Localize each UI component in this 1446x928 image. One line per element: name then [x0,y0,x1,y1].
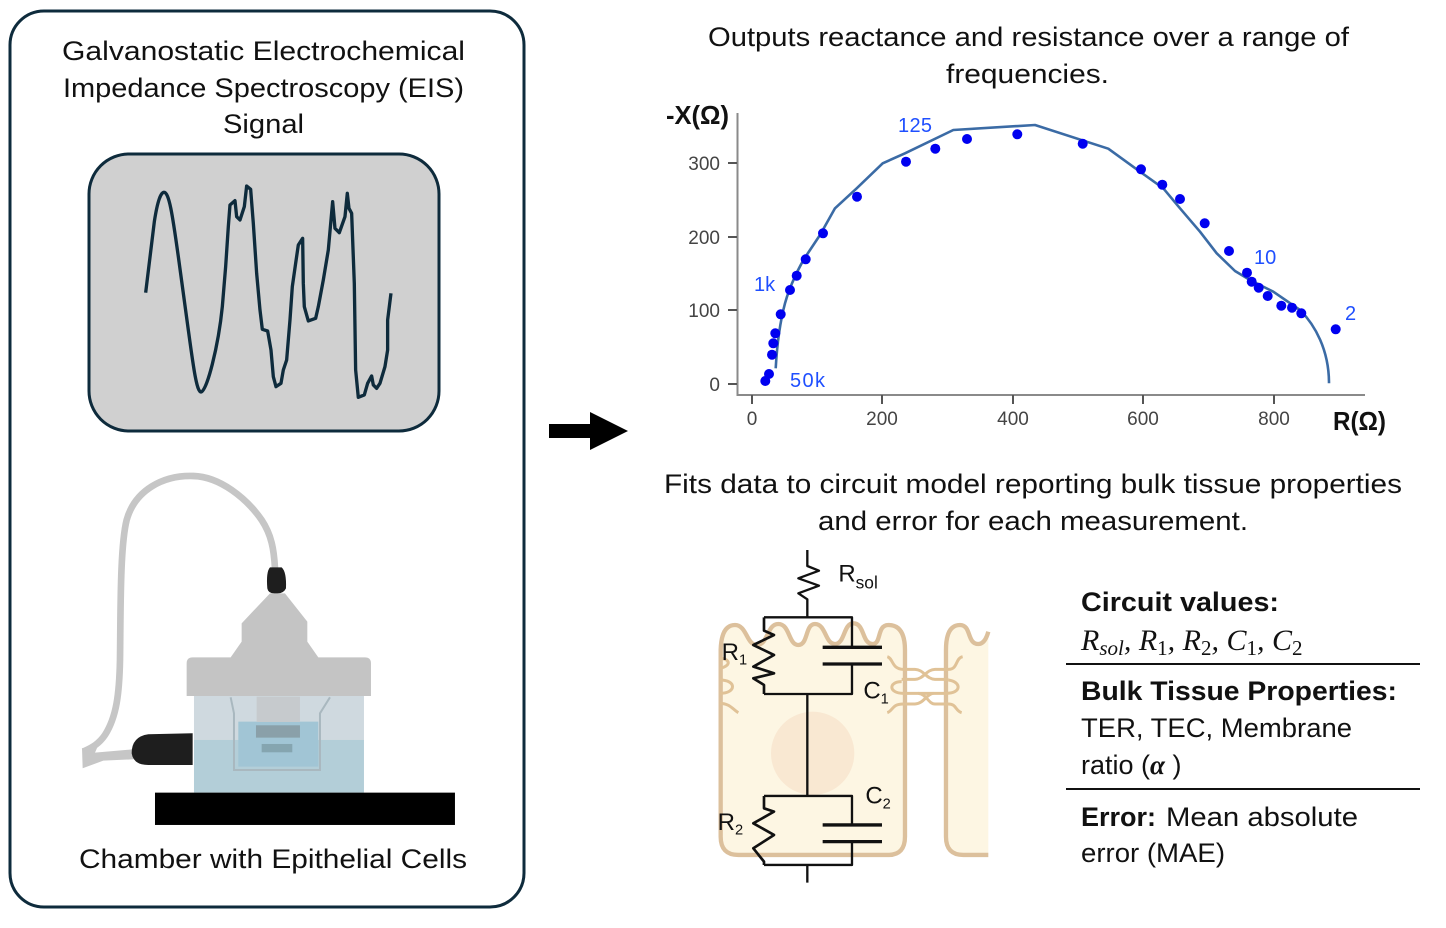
circuit values: , C [1212,624,1248,657]
junctions [720,657,963,713]
bulk tissue properties: Bulk Tissue Properties: [1081,676,1397,706]
circuit lines [753,550,852,883]
frequency labels: 2 [1345,303,1356,325]
circuit labels: sol [856,572,878,592]
frequency labels: 10 [1254,247,1276,269]
circuit labels: 2 [883,797,891,813]
heading: outputs [708,22,1350,89]
circuit labels: R [838,561,856,588]
frequency labels: 1k [754,274,776,296]
frequency labels: 125 [898,115,932,137]
axis labels: 800 [1258,409,1290,430]
circuit values: 2 [1201,636,1212,660]
circuit values: 2 [1292,636,1303,660]
circuit values: , R [1168,624,1201,657]
axes [728,113,1365,404]
fit line [776,125,1329,383]
axis labels: 600 [1127,409,1159,430]
frequency labels [754,115,1356,392]
error: error (MAE) [1081,838,1225,868]
circuit values: R [1081,624,1099,657]
axis labels: 0 [709,375,720,396]
axis labels: 200 [866,409,898,430]
heading: fits [664,469,1402,536]
error: Error: [1081,802,1156,832]
bulk tissue properties: TER, TEC, Membrane [1081,713,1352,743]
axis labels: 0 [747,409,757,430]
circuit values: , C [1257,624,1293,657]
axis labels: 100 [688,301,720,322]
capacitor plates [823,647,882,842]
heading: EIS signal: Signal [223,109,304,139]
cell 2 [946,625,988,855]
bulk tissue properties [1081,676,1397,780]
frequency labels: 50k [790,370,826,392]
signal waveform panel [89,154,439,431]
signal trace [146,186,391,397]
heading: EIS signal: Galvanostatic Electrochemical [62,36,465,66]
arrow [549,412,628,450]
axis labels: 400 [997,409,1029,430]
circuit values: sol [1099,636,1124,660]
circuit labels: 2 [735,823,743,839]
circuit labels: 1 [739,653,747,669]
circuit values [1080,587,1303,660]
heading: outputs: Outputs reactance and resistance over a range of [708,22,1350,52]
axis labels: -X(Ω) [666,100,729,130]
label: chamber: Chamber with Epithelial Cells [79,844,467,874]
circuit labels: R [718,809,735,836]
heading: fits: and error for each measurement. [818,506,1248,536]
illustration: chamber [82,476,455,825]
circuit labels: C [863,677,881,704]
circuit labels: C [865,782,883,809]
heading: EIS signal: Impedance Spectroscopy (EIS) [63,73,464,103]
bulk tissue properties: ratio (α ) [1081,750,1181,780]
diagram: circuit on epithelial cells [718,550,988,883]
circuit labels: 1 [881,692,889,708]
axis labels: 200 [688,228,720,249]
circuit labels: R [722,639,739,666]
circuit labels [718,561,891,839]
chart: Nyquist plot [666,100,1386,436]
nucleus [771,712,854,795]
circuit values: Circuit values: [1081,587,1279,617]
axis labels [666,100,1386,436]
heading: outputs: frequencies. [946,59,1109,89]
cell 1 [721,623,905,855]
error: Mean absolute [1166,802,1358,832]
data points [760,129,1341,386]
circuit values: 1 [1247,636,1257,660]
circuit values: , R [1124,624,1157,657]
axis labels: 300 [688,154,720,175]
heading: EIS signal [62,36,465,139]
panel: outputs list [1066,587,1420,868]
panel: EIS signal and chamber [10,11,524,907]
heading: fits: Fits data to circuit model reporting bulk tissue properties [664,469,1402,499]
circuit values: 1 [1157,636,1168,660]
axis labels: R(Ω) [1333,406,1386,436]
error [1081,802,1358,868]
